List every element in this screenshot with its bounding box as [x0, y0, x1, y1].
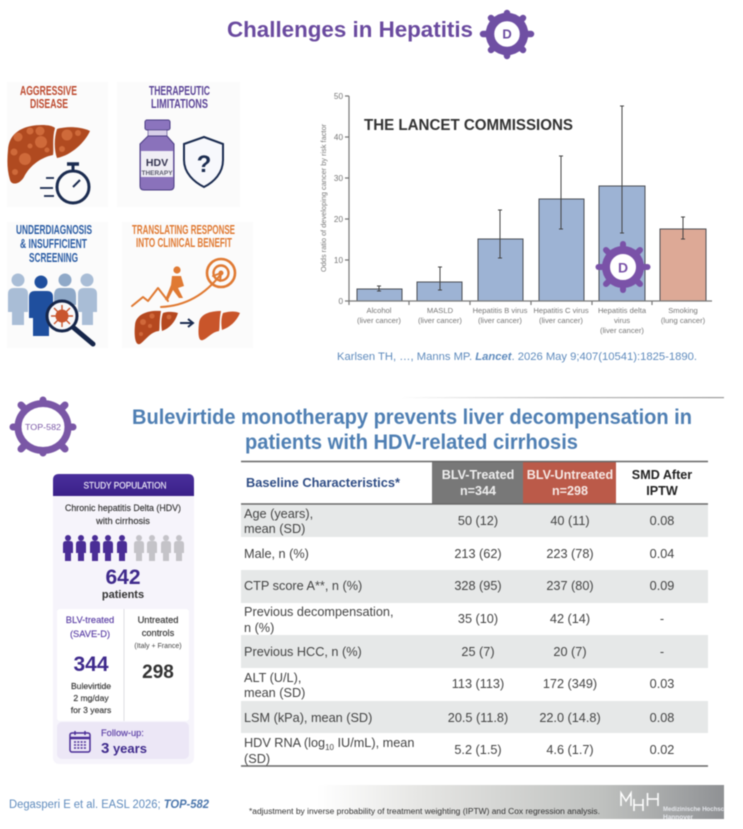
icon: HDV therapy vial	[140, 120, 174, 190]
stat: 642 patients: 642	[105, 566, 141, 589]
table header: n=344	[460, 484, 496, 498]
heading: Bulevirtide monotherapy: patients with HDV-related cirrhosis	[245, 431, 578, 454]
heading: underdiagnosis	[16, 223, 92, 265]
panel: study population	[53, 474, 194, 764]
icon: shield question: ?	[197, 151, 211, 178]
table values: BLV-untreated: 237 (80)	[546, 579, 594, 593]
y axis labels: 40	[334, 133, 343, 142]
heading: underdiagnosis: SCREENING	[29, 251, 78, 265]
table values: BLV-treated: 20.5 (11.8)	[448, 711, 508, 725]
arm: untreated controls: controls	[142, 628, 175, 638]
logo: MHH: Medizinische Hochsc	[663, 806, 724, 813]
icon: patient figures	[63, 535, 184, 561]
arm: BLV-treated: 344	[73, 653, 109, 676]
panel: aggressive disease	[7, 82, 108, 207]
error bars	[377, 106, 685, 291]
heading: therapeutic limitations	[149, 84, 210, 111]
icon: healthy liver	[198, 311, 240, 340]
table header: SMD After	[632, 468, 692, 482]
table row labels: IU/mL), mean	[334, 736, 414, 750]
arm: BLV-treated	[66, 615, 114, 715]
arrow: liver improvement	[180, 319, 193, 327]
table values: BLV-treated: 113 (113)	[452, 677, 504, 691]
icon: TOP-582 gear: TOP-582	[25, 422, 61, 432]
arm: untreated controls	[134, 615, 182, 683]
table header: n=298	[552, 484, 588, 498]
table row labels: mean (SD)	[244, 522, 305, 536]
title: Challenges in Hepatitis: Challenges in Hepatitis	[227, 17, 473, 42]
table values: BLV-untreated: 40 (11)	[550, 514, 590, 528]
text: cohort description: Chronic hepatitis Delta (HDV)	[65, 503, 181, 513]
table row labels: ALT (U/L),	[244, 671, 301, 685]
y axis title: Odds ratio of developing cancer by risk factor	[319, 124, 328, 272]
y axis labels: 30	[334, 174, 343, 183]
table row labels: Previous HCC, n (%)	[244, 645, 362, 659]
icon: cirrhotic liver	[7, 125, 90, 184]
table row labels: (SD)	[244, 752, 270, 766]
x axis labels: (liver cancer)	[539, 316, 583, 325]
heading: aggressive disease: AGGRESSIVE	[20, 84, 77, 98]
table values: BLV-treated: 213 (62)	[454, 547, 502, 561]
axes	[345, 96, 712, 305]
table row labels: Male, n (%)	[244, 547, 309, 561]
stat: 642 patients	[102, 566, 144, 601]
table values: BLV-untreated: 42 (14)	[550, 612, 590, 626]
heading: underdiagnosis: & INSUFFICIENT	[20, 237, 87, 251]
panel: translating response into clinical benefit	[122, 222, 253, 348]
header: study population: STUDY POPULATION	[84, 480, 166, 490]
heading: translating response	[132, 223, 235, 250]
arm: BLV-treated: Bulevirtide	[71, 681, 111, 691]
x axis labels: (liver cancer)	[357, 316, 401, 325]
x axis labels: (liver cancer)	[600, 326, 644, 335]
table row labels: 10	[325, 743, 335, 752]
table values: SMD after IPTW: -	[660, 612, 664, 626]
x axis labels: MASLD	[427, 306, 454, 315]
icon: calendar	[70, 731, 90, 752]
table values: BLV-untreated	[539, 514, 601, 757]
icon: magnifier with virus	[47, 301, 93, 344]
x axis labels: (lung cancer)	[661, 316, 706, 325]
heading: translating response: TRANSLATING RESPONSE	[132, 223, 235, 237]
y axis labels: 50	[334, 92, 343, 101]
icon: hepatitis D gear: D	[502, 26, 512, 42]
header: study population	[53, 474, 194, 496]
table values: SMD after IPTW	[650, 514, 674, 757]
table values: SMD after IPTW: 0.08	[650, 514, 674, 528]
arm: BLV-treated: for 3 years	[71, 705, 111, 715]
arm: untreated controls: Untreated	[138, 615, 178, 625]
citation: Degasperi: Degasperi E et al. EASL 2026; TOP-582	[9, 799, 210, 811]
icon: HDV therapy vial: THERAPY	[141, 170, 173, 177]
table header: IPTW	[646, 484, 678, 498]
panel: follow-up: 3 years	[101, 740, 147, 757]
arm: untreated controls: 298	[142, 662, 174, 683]
footnote: *adjustment by inverse probability of treatment weighting (IPTW) and Cox regression analysis.	[249, 807, 600, 816]
heading: aggressive disease	[20, 84, 77, 111]
table values: SMD after IPTW: 0.03	[650, 677, 674, 691]
y axis labels: 0	[338, 297, 343, 306]
text: cohort description: with cirrhosis	[95, 516, 150, 526]
stat: 642 patients: patients	[102, 589, 144, 601]
table values: SMD after IPTW: 0.08	[650, 711, 674, 725]
arm: BLV-treated: 2 mg/day	[73, 693, 109, 703]
x axis labels: Hepatitis C virus	[533, 306, 589, 315]
table values: SMD after IPTW: -	[660, 645, 664, 659]
footer band	[318, 785, 724, 821]
icon: stopwatch	[40, 164, 89, 203]
x axis labels: Alcohol	[367, 306, 392, 315]
table values: BLV-untreated: 4.6 (1.7)	[546, 743, 594, 757]
citation: Lancet: Karlsen TH, …, Manns MP. Lancet. 2026 May 9;407(10541):1825-1890.	[337, 351, 697, 363]
table row labels: mean (SD)	[244, 686, 305, 700]
table values: BLV-untreated: 172 (349)	[543, 677, 597, 691]
heading: The Lancet Commissions: THE LANCET COMMISSIONS	[364, 117, 573, 134]
icon: group of people	[8, 274, 97, 336]
table row stripes	[241, 505, 708, 733]
y axis labels	[334, 92, 343, 306]
arrow: rising path	[132, 273, 221, 307]
table values: BLV-treated: 50 (12)	[458, 514, 498, 528]
heading: aggressive disease: DISEASE	[30, 97, 68, 111]
icon: hepatitis D gear on bar: D	[618, 260, 628, 276]
table values: BLV-untreated: 223 (78)	[546, 547, 594, 561]
arm: untreated controls: (Italy + France)	[134, 643, 182, 650]
table values: BLV-untreated: 22.0 (14.8)	[539, 711, 601, 725]
x axis labels	[357, 306, 706, 335]
table header: Baseline Characteristics*	[246, 476, 400, 490]
table values: SMD after IPTW: 0.09	[650, 579, 674, 593]
table row labels: HDV RNA (log	[244, 736, 325, 750]
table values: BLV-treated: 25 (7)	[461, 645, 495, 659]
table values: BLV-treated: 328 (95)	[454, 579, 502, 593]
icon: diseased liver	[135, 311, 178, 344]
y axis labels: 10	[334, 256, 343, 265]
table row labels: Previous decompensation,	[244, 605, 394, 619]
icon: hepatitis D gear	[483, 13, 531, 56]
icon: HDV therapy vial: HDV	[146, 157, 168, 169]
icon: TOP-582 gear	[13, 400, 73, 453]
panel: follow-up: Follow-up:	[101, 728, 144, 738]
table values: BLV-treated: 35 (10)	[458, 612, 498, 626]
heading: therapeutic limitations: THERAPEUTIC	[149, 84, 210, 98]
panel: therapeutic limitations	[117, 82, 240, 207]
bars	[357, 186, 706, 301]
y axis labels: 20	[334, 215, 343, 224]
x axis labels: (liver cancer)	[418, 316, 462, 325]
heading: Bulevirtide monotherapy	[132, 406, 692, 454]
x axis labels: (liver cancer)	[478, 316, 522, 325]
icon: target	[207, 259, 235, 287]
table values: BLV-treated: 5.2 (1.5)	[454, 743, 502, 757]
table row labels: Age (years),	[244, 507, 313, 521]
panel: follow-up	[57, 722, 189, 759]
icon: walking person	[165, 266, 184, 300]
heading: translating response: INTO CLINICAL BENEFIT	[136, 236, 232, 250]
panel: study arms	[57, 609, 189, 721]
heading: Bulevirtide monotherapy: Bulevirtide monotherapy prevents liver decompensation in	[132, 406, 692, 429]
x axis labels: Smoking	[668, 306, 698, 315]
table row labels: LSM (kPa), mean (SD)	[244, 711, 372, 725]
text: cohort description	[65, 503, 181, 526]
table header: BLV-Treated	[442, 468, 514, 482]
icon: hepatitis D gear on bar	[598, 244, 648, 290]
x axis labels: Hepatitis B virus	[473, 306, 528, 315]
heading: underdiagnosis: UNDERDIAGNOSIS	[16, 223, 92, 237]
table header	[241, 462, 708, 504]
chart: odds ratio of developing cancer by risk factor	[319, 92, 712, 335]
table values: SMD after IPTW: 0.02	[650, 743, 674, 757]
table row labels	[244, 507, 414, 766]
table values: BLV-untreated: 20 (7)	[553, 645, 587, 659]
x axis labels: virus	[614, 316, 630, 325]
table row labels: n (%)	[244, 621, 274, 635]
x axis labels: Hepatitis delta	[598, 306, 647, 315]
table row labels: CTP score A**, n (%)	[244, 579, 362, 593]
heading: therapeutic limitations: LIMITATIONS	[151, 97, 208, 111]
table: baseline characteristics	[241, 462, 708, 766]
panel: underdiagnosis and insufficient screening	[7, 222, 108, 348]
table values: SMD after IPTW: 0.04	[650, 547, 674, 561]
logo: MHH: Hannover	[663, 814, 693, 821]
logo: MHH	[621, 793, 724, 821]
arm: BLV-treated: BLV-treated	[66, 615, 114, 625]
table values: BLV-treated	[448, 514, 508, 757]
arm: BLV-treated: (SAVE-D)	[70, 629, 110, 639]
table header: BLV-Untreated	[527, 468, 613, 482]
